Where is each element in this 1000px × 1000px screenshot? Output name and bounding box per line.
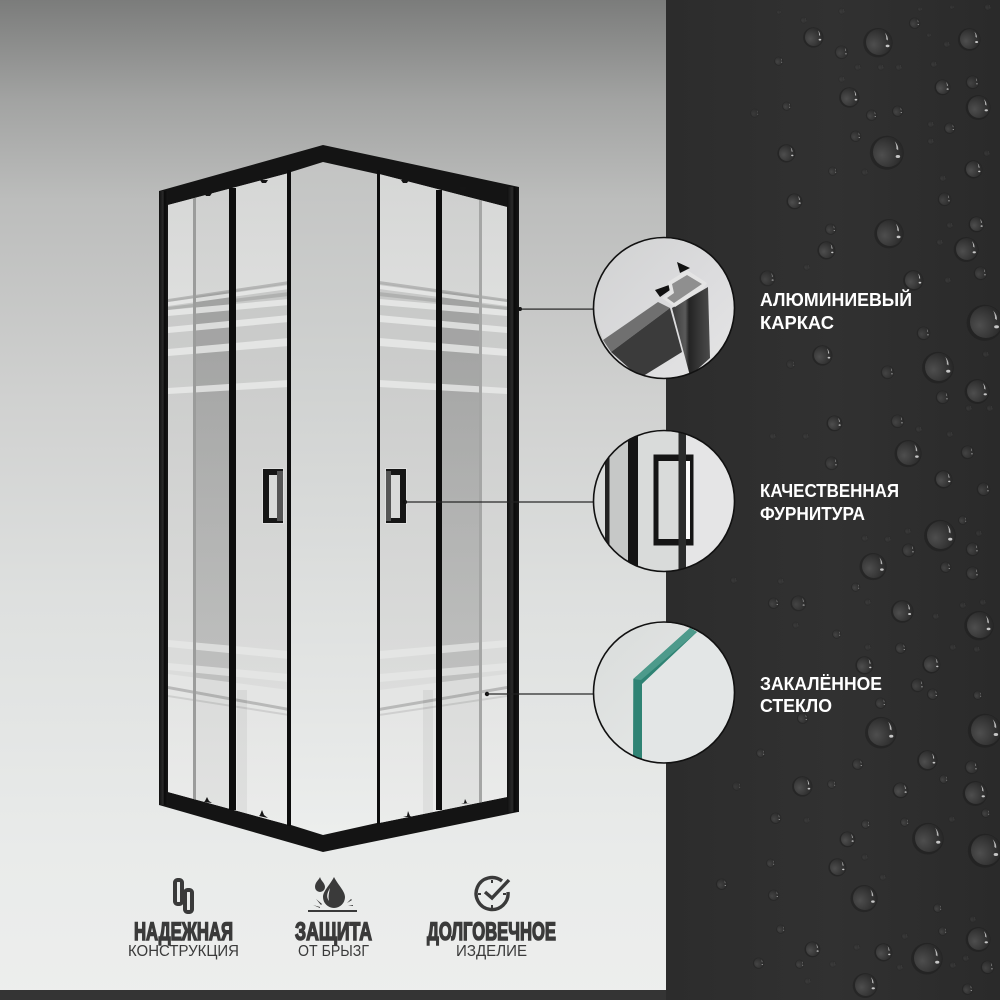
callout circle: tempered glass	[590, 620, 740, 770]
feature: splash protection: ОТ БРЫЗГ	[298, 943, 369, 960]
feature: reliable construction	[128, 918, 239, 960]
label: tempered glass: ЗАКАЛЁННОЕ	[760, 674, 882, 694]
centre glass panel	[291, 162, 377, 835]
connector: frame	[518, 307, 594, 311]
connector: glass	[485, 692, 594, 696]
callout circle: hardware	[590, 428, 740, 578]
feature: splash protection: ЗАЩИТА	[295, 918, 372, 946]
frame	[159, 145, 519, 852]
shower enclosure	[159, 145, 519, 852]
feature: durable product: ДОЛГОВЕЧНОЕ	[427, 918, 556, 946]
background: light wall	[0, 0, 666, 1000]
callout circle: aluminium frame	[590, 235, 740, 385]
label: tempered glass	[760, 674, 882, 716]
bottom dark band	[0, 990, 666, 1000]
label: aluminium frame: КАРКАС	[760, 313, 834, 333]
label: aluminium frame: АЛЮМИНИЕВЫЙ	[760, 289, 912, 310]
panel: dark wet wall	[666, 0, 1000, 1000]
label: quality hardware: ФУРНИТУРА	[760, 504, 865, 524]
feature: reliable construction: НАДЕЖНАЯ	[134, 918, 233, 946]
feature: splash protection	[295, 918, 372, 960]
roller clips	[204, 180, 470, 818]
connector: handle	[403, 500, 594, 504]
left door handle	[262, 468, 284, 524]
feature: durable product	[427, 918, 556, 960]
label: tempered glass: СТЕКЛО	[760, 696, 832, 716]
right door handle	[385, 468, 407, 524]
right glass wall	[379, 170, 509, 830]
icon: splash drop	[308, 877, 357, 912]
feature: durable product: ИЗДЕЛИЕ	[456, 943, 527, 960]
left glass wall	[168, 170, 290, 830]
icon: clock with check	[476, 878, 509, 910]
label: quality hardware	[760, 481, 899, 524]
icon: chain links	[175, 880, 192, 912]
vertical door bars	[229, 170, 442, 826]
label: quality hardware: КАЧЕСТВЕННАЯ	[760, 481, 899, 501]
label: aluminium frame	[760, 289, 912, 333]
feature: reliable construction: КОНСТРУКЦИЯ	[128, 943, 239, 960]
water droplets	[716, 4, 1000, 998]
